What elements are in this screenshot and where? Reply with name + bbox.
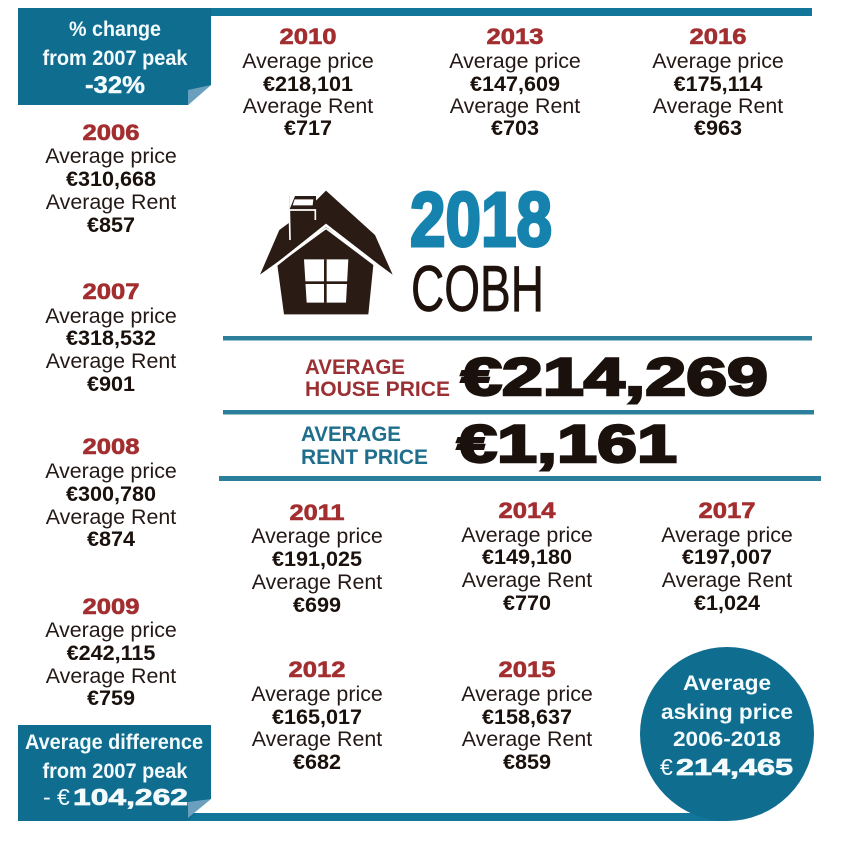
- year block: 2006: €857: [87, 212, 135, 237]
- callout circle: average asking price: 214,465: [676, 754, 793, 780]
- year block: 2014: [461, 498, 593, 615]
- callout circle: average asking price: asking price: [661, 701, 793, 724]
- year block: 2016: €175,114: [674, 71, 762, 96]
- year block: 2011: Average Rent: [252, 570, 382, 594]
- callout circle: average asking price: Average: [683, 672, 771, 695]
- year block: 2009: €759: [87, 685, 135, 710]
- year block: 2014: Average price: [461, 523, 593, 547]
- label: average house price: AVERAGE: [305, 356, 405, 379]
- year block: 2011: €699: [293, 592, 341, 617]
- year block: 2012: 2012: [288, 657, 346, 682]
- label: average rent price: RENT PRICE: [301, 446, 428, 469]
- year block: 2011: [251, 500, 383, 617]
- year block: 2006: Average Rent: [46, 190, 176, 214]
- year block: 2014: €770: [503, 590, 551, 615]
- year block: 2017: €197,007: [682, 544, 772, 569]
- year block: 2016: Average price: [652, 49, 784, 73]
- year block: 2009: Average price: [45, 618, 177, 642]
- year block: 2012: Average price: [251, 682, 383, 706]
- year block: 2014: Average Rent: [462, 568, 592, 592]
- year block: 2010: €218,101: [263, 71, 353, 96]
- year block: 2006: [45, 120, 177, 237]
- year block: 2015: 2015: [498, 657, 556, 682]
- year block: 2006: €310,668: [66, 166, 156, 191]
- year block: 2013: [449, 24, 581, 140]
- year block: 2011: Average price: [251, 524, 383, 548]
- bottom rule: [18, 813, 728, 821]
- year block: 2017: [661, 498, 793, 615]
- banner: average difference from 2007 peak: 104,262: [73, 784, 188, 810]
- year block: 2006: Average price: [45, 144, 177, 168]
- year block: 2007: Average price: [45, 304, 177, 328]
- year block: 2009: [45, 594, 177, 710]
- year block: 2008: Average price: [45, 459, 177, 483]
- year block: 2012: €682: [293, 749, 341, 774]
- rule between prices: [223, 410, 814, 414]
- label: average house price: [305, 356, 450, 401]
- year block: 2007: 2007: [82, 279, 140, 304]
- banner: average difference from 2007 peak: [18, 725, 211, 821]
- banner: percent change from 2007 peak: -32%: [85, 72, 145, 99]
- year block: 2016: €963: [694, 115, 742, 140]
- year block: 2017: Average Rent: [662, 568, 792, 592]
- value: average house price: €214,269: [461, 348, 768, 407]
- year block: 2008: €874: [87, 526, 135, 551]
- rule below rent price: [219, 476, 821, 481]
- heading: COBH: COBH: [411, 252, 544, 325]
- year block: 2011: 2011: [290, 500, 344, 525]
- year block: 2008: €300,780: [66, 481, 156, 506]
- value: average rent price: €1,161: [457, 415, 677, 474]
- rule above house price: [223, 336, 812, 340]
- banner: percent change from 2007 peak: [18, 8, 211, 105]
- year block: 2013: 2013: [486, 24, 544, 49]
- year block: 2007: [45, 279, 177, 396]
- year block: 2010: [242, 24, 374, 140]
- year block: 2013: €147,609: [470, 71, 560, 96]
- year block: 2007: Average Rent: [46, 349, 176, 373]
- year block: 2009: 2009: [82, 594, 140, 619]
- year block: 2016: 2016: [690, 24, 746, 49]
- year block: 2015: Average Rent: [462, 727, 592, 751]
- year block: 2015: €859: [503, 749, 551, 774]
- year block: 2015: Average price: [461, 682, 593, 706]
- year block: 2011: €191,025: [272, 546, 362, 571]
- year block: 2016: [652, 24, 784, 140]
- year block: 2017: €1,024: [694, 590, 760, 615]
- year block: 2012: [251, 657, 383, 774]
- label: average rent price: AVERAGE: [301, 423, 401, 446]
- top rule: [200, 8, 812, 16]
- banner: average difference from 2007 peak: Average difference: [25, 731, 203, 754]
- year block: 2007: €901: [87, 371, 135, 396]
- year block: 2015: [461, 657, 593, 774]
- heading: 2018: 2018: [410, 177, 552, 263]
- banner: average difference from 2007 peak: - €: [43, 784, 70, 810]
- year block: 2013: €703: [491, 115, 539, 140]
- year block: 2013: Average Rent: [450, 94, 580, 118]
- year block: 2010: 2010: [280, 24, 336, 49]
- year block: 2015: €158,637: [482, 704, 572, 729]
- year block: 2009: €242,115: [67, 640, 155, 665]
- year block: 2017: 2017: [698, 498, 756, 523]
- year block: 2010: €717: [284, 115, 332, 140]
- year block: 2016: Average Rent: [653, 94, 783, 118]
- label: average rent price: [301, 423, 428, 469]
- year block: 2012: Average Rent: [252, 727, 382, 751]
- year block: 2009: Average Rent: [46, 664, 176, 688]
- icon: house: [260, 191, 393, 314]
- banner: percent change from 2007 peak: % change: [69, 18, 161, 41]
- label: average house price: HOUSE PRICE: [305, 378, 450, 401]
- year block: 2008: [45, 434, 177, 551]
- banner: percent change from 2007 peak: from 2007 peak: [42, 47, 188, 70]
- callout circle: average asking price: [640, 647, 814, 821]
- year block: 2012: €165,017: [272, 704, 362, 729]
- year block: 2008: Average Rent: [46, 505, 176, 529]
- year block: 2006: 2006: [82, 120, 140, 145]
- year block: 2008: 2008: [82, 434, 140, 459]
- year block: 2013: Average price: [449, 49, 581, 73]
- year block: 2010: Average price: [242, 49, 374, 73]
- year block: 2017: Average price: [661, 523, 793, 547]
- year block: 2014: 2014: [498, 498, 556, 523]
- year block: 2014: €149,180: [482, 544, 572, 569]
- year block: 2007: €318,532: [66, 325, 156, 350]
- banner: average difference from 2007 peak: from 2007 peak: [42, 760, 188, 783]
- year block: 2010: Average Rent: [243, 94, 373, 118]
- callout circle: average asking price: 2006-2018: [673, 728, 781, 751]
- callout circle: average asking price: €: [660, 754, 673, 780]
